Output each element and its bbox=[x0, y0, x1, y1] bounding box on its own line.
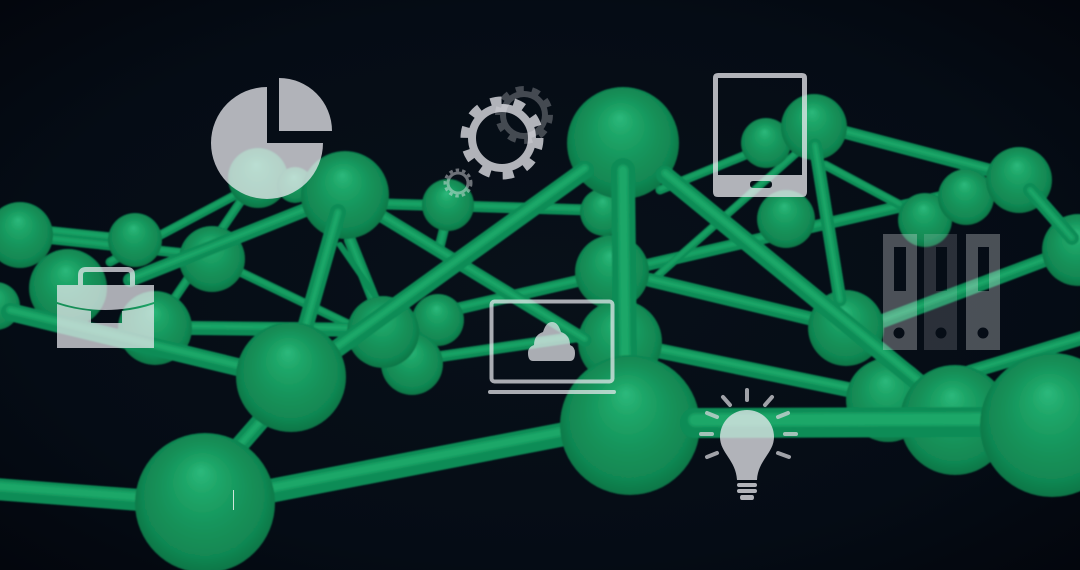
middle spheres bbox=[301, 87, 679, 368]
front rods bbox=[0, 168, 925, 500]
icon: light bulb bbox=[701, 390, 796, 500]
icon: small gear bbox=[445, 170, 471, 196]
right front sphere bbox=[980, 353, 1080, 497]
icon: binders bbox=[883, 234, 1000, 350]
icon: pie chart bbox=[211, 78, 332, 199]
cursor mark bbox=[233, 490, 234, 510]
icon: dark gear bbox=[498, 89, 550, 141]
icon: tablet bbox=[713, 73, 807, 197]
icon: laptop with cloud bbox=[488, 302, 616, 394]
icon: briefcase bbox=[57, 270, 154, 348]
back rods bbox=[20, 130, 1080, 392]
middle rods bbox=[10, 145, 1072, 370]
icon: large gear bbox=[464, 100, 540, 176]
front spheres bbox=[135, 322, 1010, 570]
horizontal rod bbox=[695, 419, 998, 423]
back spheres bbox=[0, 94, 1080, 442]
